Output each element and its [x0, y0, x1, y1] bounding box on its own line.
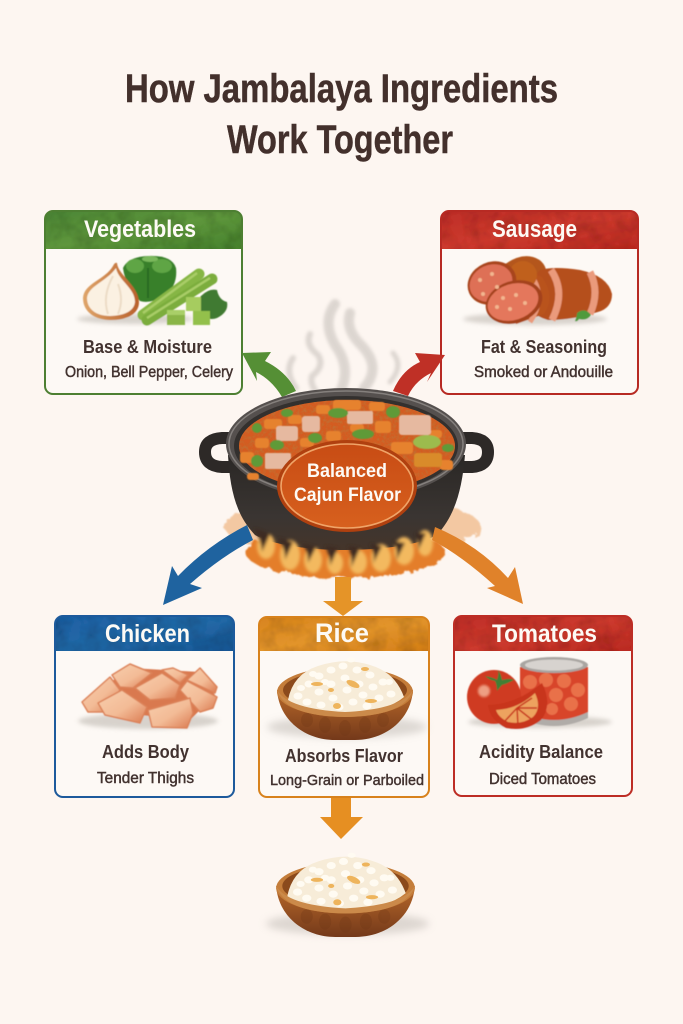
panel: vegetables [45, 211, 242, 394]
icon: finished rice bowl [266, 853, 429, 937]
pot body [228, 455, 465, 550]
flavor badge: Cajun Flavor [294, 485, 402, 506]
title: How Jambalaya Ingredients [125, 67, 558, 111]
pot handles [205, 438, 488, 467]
label: acidity balance: Acidity Balance [479, 742, 603, 762]
label: diced tomatoes: Diced Tomatoes [489, 771, 596, 788]
flame base [246, 528, 446, 578]
label: absorbs flavor: Absorbs Flavor [285, 746, 403, 766]
arrow: rice to final dish [320, 798, 363, 839]
heading: sausage: Sausage [492, 216, 577, 243]
label: tender thighs: Tender Thighs [97, 770, 194, 787]
flavor badge [277, 440, 417, 532]
arrow: to sausage [393, 353, 445, 396]
steam [289, 304, 398, 392]
heading: chicken: Chicken [105, 620, 190, 648]
icon: vegetables [77, 256, 227, 325]
stew [239, 400, 455, 492]
panel: sausage [441, 211, 638, 394]
arrow: to vegetables [242, 352, 296, 397]
arrow: to chicken [163, 525, 253, 605]
flames [254, 528, 433, 574]
heading: tomatoes: Tomatoes [492, 620, 597, 648]
label: onion, bell pepper, celery: Onion, Bell Pepper, Celery [65, 364, 233, 381]
icon: sausage [461, 254, 612, 331]
title: Work Together [227, 118, 453, 162]
heading: rice: Rice [315, 618, 369, 648]
label: smoked or andouille: Smoked or Andouille [474, 364, 613, 381]
icon: rice bowl [267, 658, 427, 740]
panel: rice [259, 617, 429, 797]
arrow: to tomatoes [432, 527, 523, 604]
arrow: to rice [323, 577, 363, 616]
label: long-grain or parboiled: Long-Grain or Parboiled [270, 772, 424, 789]
panel: chicken [55, 616, 234, 797]
flavor badge: Balanced [307, 461, 387, 482]
label: base and moisture: Base & Moisture [83, 337, 212, 357]
pot rim [226, 388, 466, 500]
cooking pot [205, 388, 488, 578]
heading: vegetables: Vegetables [84, 216, 196, 243]
title [125, 67, 558, 162]
label: adds body: Adds Body [102, 742, 189, 762]
label: fat and seasoning: Fat & Seasoning [481, 337, 607, 357]
flame haze [224, 496, 480, 556]
stew chunks [240, 400, 454, 480]
icon: chicken pieces [78, 664, 218, 729]
icon: tomatoes and can [467, 657, 612, 729]
panel: tomatoes [454, 616, 632, 796]
